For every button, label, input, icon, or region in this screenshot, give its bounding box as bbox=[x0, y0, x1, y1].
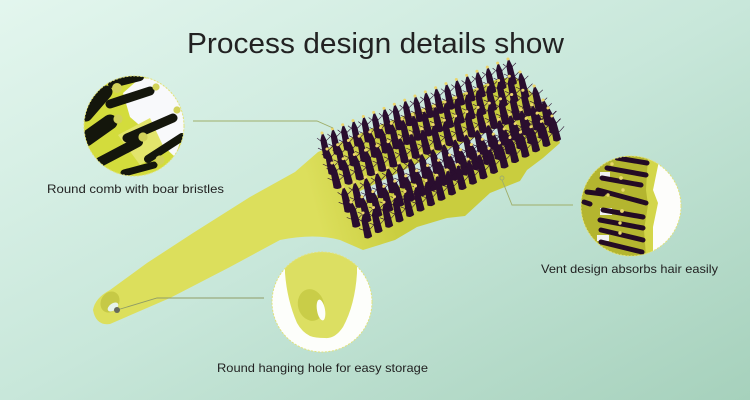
detail circle: boar bristles bbox=[84, 76, 186, 176]
vent slot bbox=[358, 128, 506, 200]
hanging hole bbox=[97, 288, 123, 316]
title: Process design details show bbox=[187, 28, 564, 60]
brush handle and head bbox=[93, 78, 560, 324]
brush product bbox=[93, 57, 564, 324]
label: boar bristles: Round comb with boar bristles bbox=[47, 182, 224, 196]
leader line: vent bbox=[500, 176, 573, 205]
detail circle: vent bbox=[581, 156, 681, 256]
detail circle: hanging hole bbox=[272, 252, 372, 352]
leader line: boar bristles bbox=[193, 121, 333, 128]
label: hanging hole: Round hanging hole for easy storage bbox=[217, 361, 428, 375]
label: vent: Vent design absorbs hair easily bbox=[541, 262, 718, 276]
leader line: hanging hole bbox=[114, 298, 264, 313]
bristles bbox=[317, 57, 564, 240]
